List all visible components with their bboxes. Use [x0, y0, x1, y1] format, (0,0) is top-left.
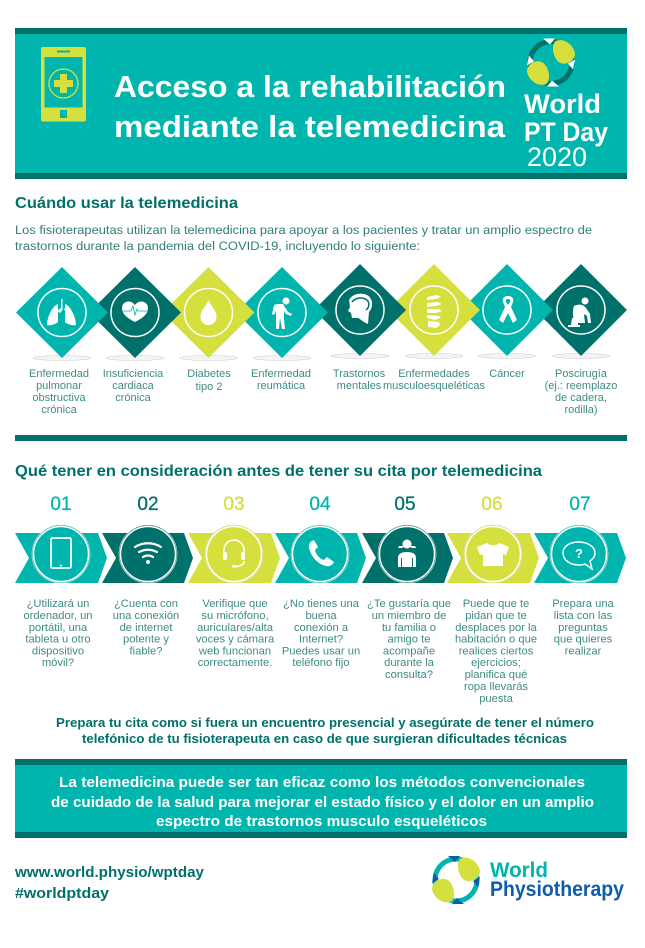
step descriptions: correctamente.: [198, 657, 272, 669]
conclusion banner: espectro de trastornos musculo esqueléticos: [156, 814, 487, 830]
heading: qué tener en consideración: Qué tener en consideración antes de tener su cita por telemedicina: [15, 463, 542, 480]
logo: World PT Day 2020: [524, 38, 608, 172]
title: mediante la telemedicina: [114, 109, 506, 144]
step descriptions: ¿Cuenta con: [114, 598, 178, 610]
step descriptions: buena: [305, 610, 337, 622]
step descriptions: planifica qué: [465, 669, 527, 681]
condition labels: [29, 368, 617, 416]
step descriptions: tableta u otro: [25, 634, 91, 646]
step descriptions: teléfono fijo: [292, 657, 350, 669]
header banner: [15, 28, 627, 179]
step descriptions: dispositivo: [32, 646, 84, 658]
condition shadows: [33, 354, 610, 360]
diamond: pulmonary disease: [16, 267, 108, 358]
step descriptions: ropa llevarás: [464, 681, 528, 693]
step descriptions: Puede que te: [463, 598, 529, 610]
step descriptions: ejercicios;: [471, 657, 521, 669]
logo: World Physiotherapy: [432, 856, 624, 904]
logo: World Physiotherapy: Physiotherapy: [490, 878, 624, 901]
condition labels: crónica: [41, 404, 78, 416]
step descriptions: acompañe: [383, 646, 435, 658]
condition labels: Diabetes: [187, 368, 231, 380]
step descriptions: lista con las: [554, 610, 613, 622]
step numbers: 05: [394, 494, 416, 515]
condition labels: tipo 2: [196, 381, 222, 393]
step numbers: 02: [137, 494, 159, 515]
step descriptions: ¿Utilizará un: [27, 598, 89, 610]
condition labels: Insuficiencia: [103, 368, 164, 380]
step descriptions: de internet: [120, 622, 173, 634]
icon: phone with medical cross: [41, 47, 86, 122]
step descriptions: preguntas: [558, 622, 608, 634]
condition labels: pulmonar: [36, 380, 82, 392]
step 5 chevron: companion: [362, 525, 453, 583]
step descriptions: que quieres: [554, 634, 613, 646]
step descriptions: tu familia o: [382, 622, 436, 634]
step descriptions: realices ciertos: [459, 646, 534, 658]
step numbers: 07: [569, 494, 591, 515]
step descriptions: amigo te: [388, 634, 430, 646]
diamond: post-surgery: [535, 264, 627, 356]
step descriptions: ordenador, un: [23, 610, 93, 622]
step descriptions: habitación o que: [455, 634, 537, 646]
step descriptions: realizar: [565, 646, 602, 658]
logo: World PT Day 2020: World: [524, 89, 601, 119]
diamond: musculoskeletal disorders: [388, 264, 480, 356]
step 3 chevron: headset: [188, 525, 280, 583]
step descriptions: puesta: [479, 693, 514, 705]
step descriptions: desplaces por la: [455, 622, 538, 634]
step descriptions: potente y: [123, 634, 169, 646]
conclusion banner: La telemedicina puede ser tan eficaz como los métodos convencionales: [59, 775, 585, 791]
intro paragraph: Los fisioterapeutas utilizan la telemedicina para apoyar a los pacientes y tratar un amplio espectro de: [15, 223, 592, 237]
condition labels: rodilla): [564, 404, 598, 416]
step descriptions: Verifique que: [202, 598, 268, 610]
step descriptions: pidan que te: [465, 610, 527, 622]
condition labels: crónica: [115, 392, 152, 404]
diamond: mental disorders: [314, 264, 406, 356]
preparation tip: Prepara tu cita como si fuera un encuentro presencial y asegúrate de tener el número: [56, 715, 594, 730]
step 4 chevron: telephone: [275, 525, 366, 583]
condition labels: Cáncer: [489, 368, 525, 380]
step descriptions: Internet?: [299, 634, 343, 646]
step numbers: 06: [481, 494, 503, 515]
logo: World PT Day 2020: PT Day: [524, 117, 608, 147]
step 6 chevron: t-shirt: [447, 525, 539, 583]
step descriptions: consulta?: [385, 669, 433, 681]
step descriptions: una conexión: [113, 610, 179, 622]
intro paragraph: trastornos durante la pandemia del COVID-19, incluyendo lo siguiente:: [15, 239, 420, 253]
condition labels: obstructiva: [32, 392, 86, 404]
step numbers: 03: [223, 494, 245, 515]
condition labels: reumática: [257, 380, 306, 392]
condition labels: (ej.: reemplazo: [545, 380, 617, 392]
step descriptions: Puedes usar un: [282, 646, 360, 658]
step 2 chevron: wifi: [102, 525, 193, 583]
step 7 chevron: question bubble: [534, 525, 626, 583]
logo: World Physiotherapy: World: [490, 859, 548, 882]
step descriptions: un miembro de: [372, 610, 446, 622]
step 1 chevron: device: [15, 525, 107, 583]
condition labels: Enfermedades: [398, 368, 470, 380]
title: Acceso a la rehabilitación: [114, 69, 506, 104]
diamond: rheumatic disease: [236, 267, 328, 358]
diamond: cancer: [461, 264, 553, 356]
heading: cuándo usar: Cuándo usar la telemedicina: [15, 195, 238, 212]
step descriptions: su micrófono,: [201, 610, 269, 622]
step descriptions: auriculares/alta: [197, 622, 274, 634]
condition labels: Trastornos: [333, 368, 386, 380]
step descriptions: ¿Te gustaría que: [367, 598, 451, 610]
footer links: www.world.physio/wptday: [14, 864, 205, 881]
step descriptions: fiable?: [130, 646, 162, 658]
diamond: heart failure: [89, 267, 181, 358]
condition labels: cardiaca: [112, 380, 155, 392]
condition labels: Poscirugía: [555, 368, 608, 380]
condition labels: Enfermedad: [251, 368, 311, 380]
logo: World PT Day 2020: 2020: [527, 142, 587, 172]
step descriptions: durante la: [384, 657, 435, 669]
condition labels: Enfermedad: [29, 368, 89, 380]
step descriptions: Prepara una: [552, 598, 615, 610]
condition labels: musculoesqueléticas: [383, 380, 486, 392]
step numbers: 01: [50, 494, 72, 515]
conclusion banner: de cuidado de la salud para mejorar el estado físico y el dolor en un amplio: [51, 795, 594, 811]
condition labels: de cadera,: [555, 392, 607, 404]
step descriptions: voces y cámara: [196, 634, 275, 646]
step descriptions: web funcionan: [198, 646, 271, 658]
step descriptions: ¿No tienes una: [283, 598, 360, 610]
step 7 chevron: question bubble: ?: [575, 546, 583, 561]
step descriptions: móvil?: [42, 657, 74, 669]
step descriptions: conexión a: [294, 622, 349, 634]
diamond: diabetes: [162, 267, 254, 358]
step descriptions: portátil, una: [29, 622, 88, 634]
condition labels: mentales: [337, 380, 382, 392]
conclusion banner: [15, 759, 627, 838]
step descriptions: [23, 598, 615, 705]
step numbers: 04: [309, 494, 331, 515]
step numbers: [50, 494, 591, 515]
preparation tip: telefónico de tu fisioterapeuta en caso de que surgieran dificultades técnicas: [82, 731, 567, 746]
footer links: #worldptday: [15, 885, 110, 902]
